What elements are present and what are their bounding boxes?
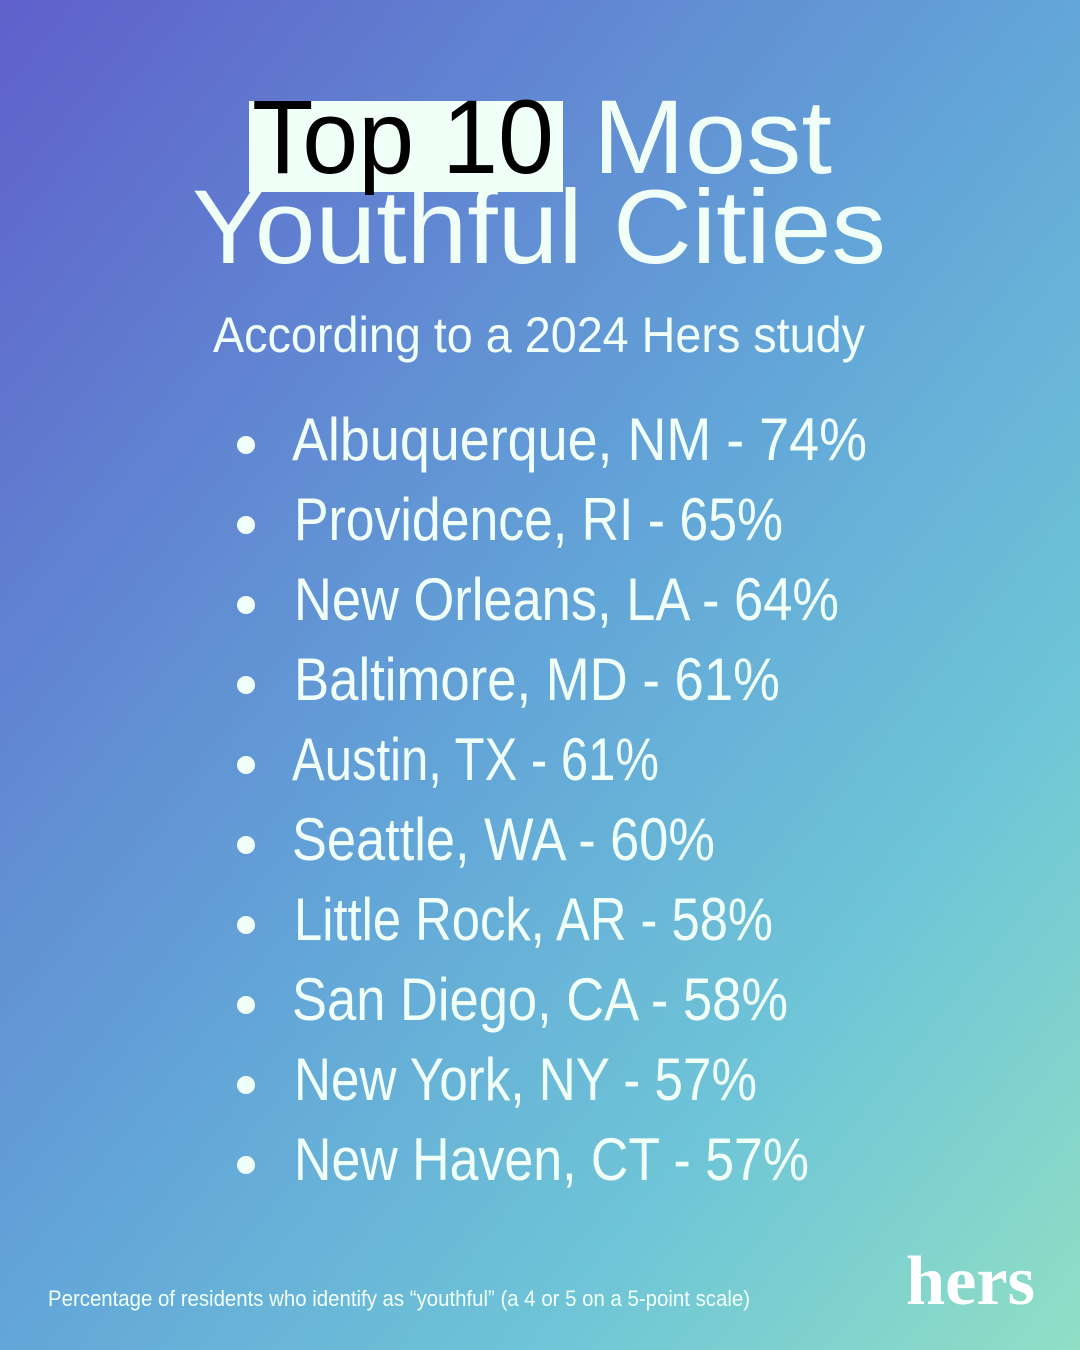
title: [192, 79, 886, 286]
footnote: Percentage of residents who identify as “youthful” (a 4 or 5 on a 5-point scale): [48, 1286, 750, 1311]
title highlight box: [249, 101, 563, 192]
list item: Providence: Providence, RI - 65%: [294, 486, 783, 553]
list item: New York: New York, NY - 57%: [294, 1046, 757, 1113]
list item: San Diego: San Diego, CA - 58%: [292, 966, 788, 1033]
list item: Austin: Austin, TX - 61%: [292, 726, 659, 793]
list item: Baltimore: Baltimore, MD - 61%: [294, 646, 780, 713]
list item: Little Rock: Little Rock, AR - 58%: [294, 886, 773, 953]
logo: hers: hers: [906, 1243, 1035, 1320]
title text: Top 10: Top 10: [252, 79, 554, 196]
title text: Most: Most: [593, 79, 832, 196]
list item: Seattle: Seattle, WA - 60%: [292, 806, 715, 873]
list item: New Orleans: New Orleans, LA - 64%: [294, 566, 839, 633]
title text: Youthful Cities: Youthful Cities: [192, 169, 886, 286]
subtitle: According to a 2024 Hers study: [213, 307, 865, 363]
ranked city list: [237, 406, 867, 1193]
list item: Albuquerque: Albuquerque, NM - 74%: [292, 406, 867, 473]
list item: New Haven: New Haven, CT - 57%: [294, 1126, 809, 1193]
